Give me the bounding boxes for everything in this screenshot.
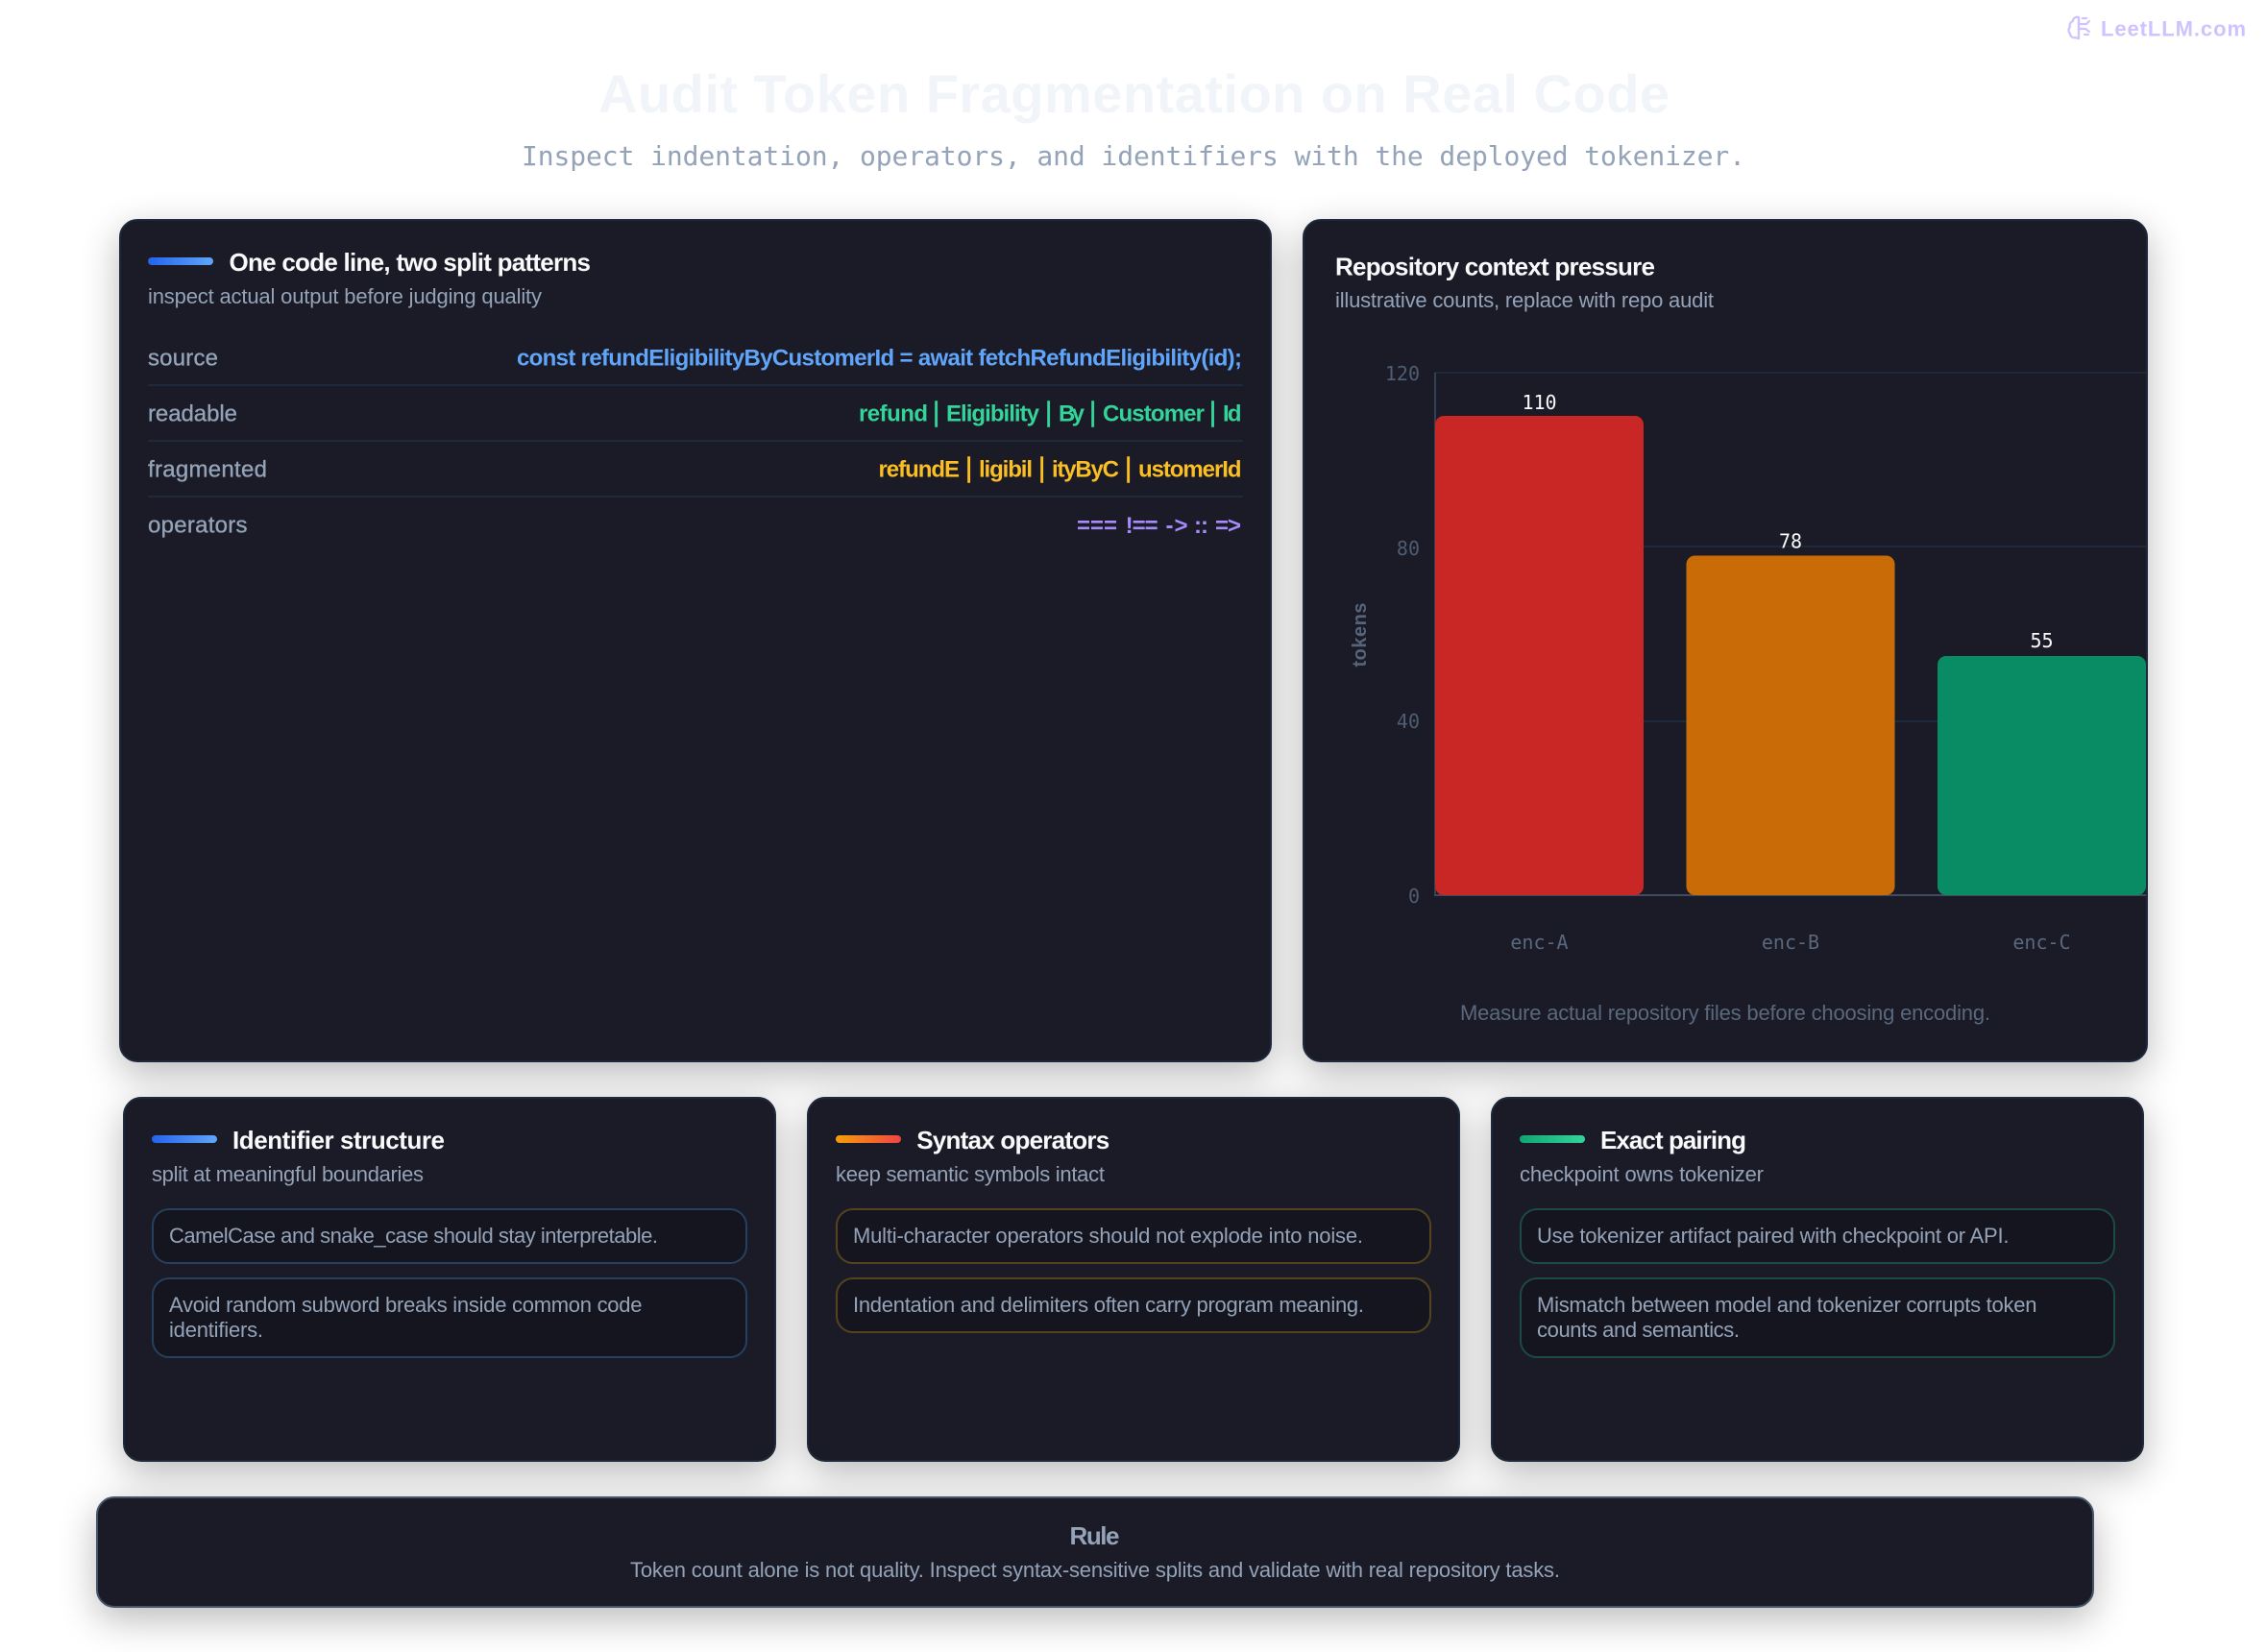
note: Multi-character operators should not explode into noise. [853, 1224, 1363, 1248]
row: operators: => [1215, 513, 1241, 539]
row: readable: refund [859, 401, 928, 426]
subtitle: Inspect indentation, operators, and identifiers with the deployed tokenizer. [522, 140, 1745, 172]
row: readable: readable [148, 401, 237, 426]
row: fragmented: | [965, 453, 972, 484]
accent bar: green [1520, 1135, 1585, 1143]
panel: exact pairing [1492, 1098, 2143, 1461]
note [153, 1209, 746, 1263]
note [1521, 1278, 2114, 1357]
panel: repository context pressure [1304, 220, 2147, 1061]
row: fragmented: | [1038, 453, 1045, 484]
note [837, 1209, 1430, 1263]
row: operators: !== [1126, 513, 1158, 539]
row: readable: | [1209, 398, 1216, 428]
wordmark: LeetLLM.com [2101, 17, 2246, 40]
note [153, 1278, 746, 1357]
row: fragmented: ustomerId [1138, 457, 1241, 482]
heading: Exact pairing [1600, 1126, 1746, 1154]
bar: enc-A 110: 110 [1522, 391, 1557, 414]
row: fragmented: | [1125, 453, 1132, 484]
row: source: source [148, 346, 218, 371]
panel heading: One code line, two split patterns [229, 248, 591, 277]
row: fragmented: fragmented [148, 457, 267, 482]
row: source [148, 346, 1242, 371]
accent bar: blue [152, 1135, 217, 1143]
note: Use tokenizer artifact paired with checkpoint or API. [1537, 1224, 2010, 1248]
row: operators: :: [1194, 513, 1208, 539]
subheading: keep semantic symbols intact [836, 1162, 1105, 1186]
rule body: Token count alone is not quality. Inspect syntax-sensitive splits and validate with real repository tasks. [630, 1558, 1560, 1582]
row: readable: Id [1223, 401, 1241, 426]
bar: enc-C 55 [1938, 629, 2146, 954]
bar: enc-B 78: enc-B [1762, 931, 1819, 954]
y axis ticks: 40 [1397, 710, 1420, 733]
note: CamelCase and snake_case should stay interpretable. [169, 1224, 658, 1248]
row: source: const refundEligibilityByCustomerId = await fetchRefundEligibility(id); [517, 346, 1242, 371]
panel: one code line, two split patterns [120, 220, 1271, 1061]
accent bar: orange [836, 1135, 901, 1143]
bar: enc-C 55: 55 [2030, 629, 2054, 652]
row: fragmented: ityByC [1052, 457, 1119, 482]
y axis ticks: 80 [1397, 537, 1420, 560]
bar chart [1350, 362, 2146, 954]
callout: rule [97, 1497, 2093, 1607]
y axis ticks: 120 [1385, 362, 1420, 385]
note [837, 1278, 1430, 1332]
chart caption: Measure actual repository files before choosing encoding. [1460, 1001, 1990, 1025]
title: Audit Token Fragmentation on Real Code [598, 63, 1670, 124]
row: readable: | [933, 398, 939, 428]
row: operators: -> [1166, 513, 1187, 539]
panel: syntax operators [808, 1098, 1459, 1461]
row: readable [148, 398, 1241, 428]
row: fragmented: ligibil [979, 457, 1033, 482]
subheading: split at meaningful boundaries [152, 1162, 424, 1186]
icon: brain [2069, 17, 2089, 38]
row: readable: By [1059, 401, 1085, 426]
note: Mismatch between model and tokenizer corrupts token [1537, 1293, 2036, 1317]
row: operators: === [1077, 513, 1117, 539]
watermark: LeetLLM.com [2069, 17, 2246, 40]
y axis ticks: 0 [1408, 885, 1420, 908]
subheading: checkpoint owns tokenizer [1520, 1162, 1764, 1186]
row: readable: | [1045, 398, 1052, 428]
panel: identifier structure [124, 1098, 775, 1461]
panel subheading: inspect actual output before judging quality [148, 284, 542, 308]
accent bar: blue [148, 257, 213, 265]
row: readable: Customer [1103, 401, 1205, 426]
row: operators [148, 513, 1241, 539]
note: Indentation and delimiters often carry program meaning. [853, 1293, 1364, 1317]
rule heading: Rule [1070, 1521, 1120, 1550]
row: fragmented [148, 453, 1241, 484]
heading: Identifier structure [232, 1126, 445, 1154]
y axis label: tokens [1350, 603, 1371, 667]
row: fragmented: refundE [878, 457, 960, 482]
panel heading: Repository context pressure [1335, 252, 1655, 280]
bar: enc-A 110: enc-A [1510, 931, 1569, 954]
heading: Syntax operators [916, 1126, 1109, 1154]
row: operators: operators [148, 513, 248, 538]
note: Avoid random subword breaks inside common code [169, 1293, 642, 1317]
bar: enc-C 55: enc-C [2012, 931, 2071, 954]
row: readable: | [1089, 398, 1096, 428]
note: counts and semantics. [1537, 1318, 1740, 1342]
panel subheading: illustrative counts, replace with repo audit [1335, 288, 1714, 312]
bar: enc-B 78: 78 [1779, 530, 1802, 553]
y axis ticks [1385, 362, 1420, 908]
note: identifiers. [169, 1318, 263, 1342]
row: readable: Eligibility [946, 401, 1040, 426]
bar: enc-B 78 [1687, 530, 1894, 954]
note [1521, 1209, 2114, 1263]
bar: enc-A 110 [1435, 391, 1644, 954]
